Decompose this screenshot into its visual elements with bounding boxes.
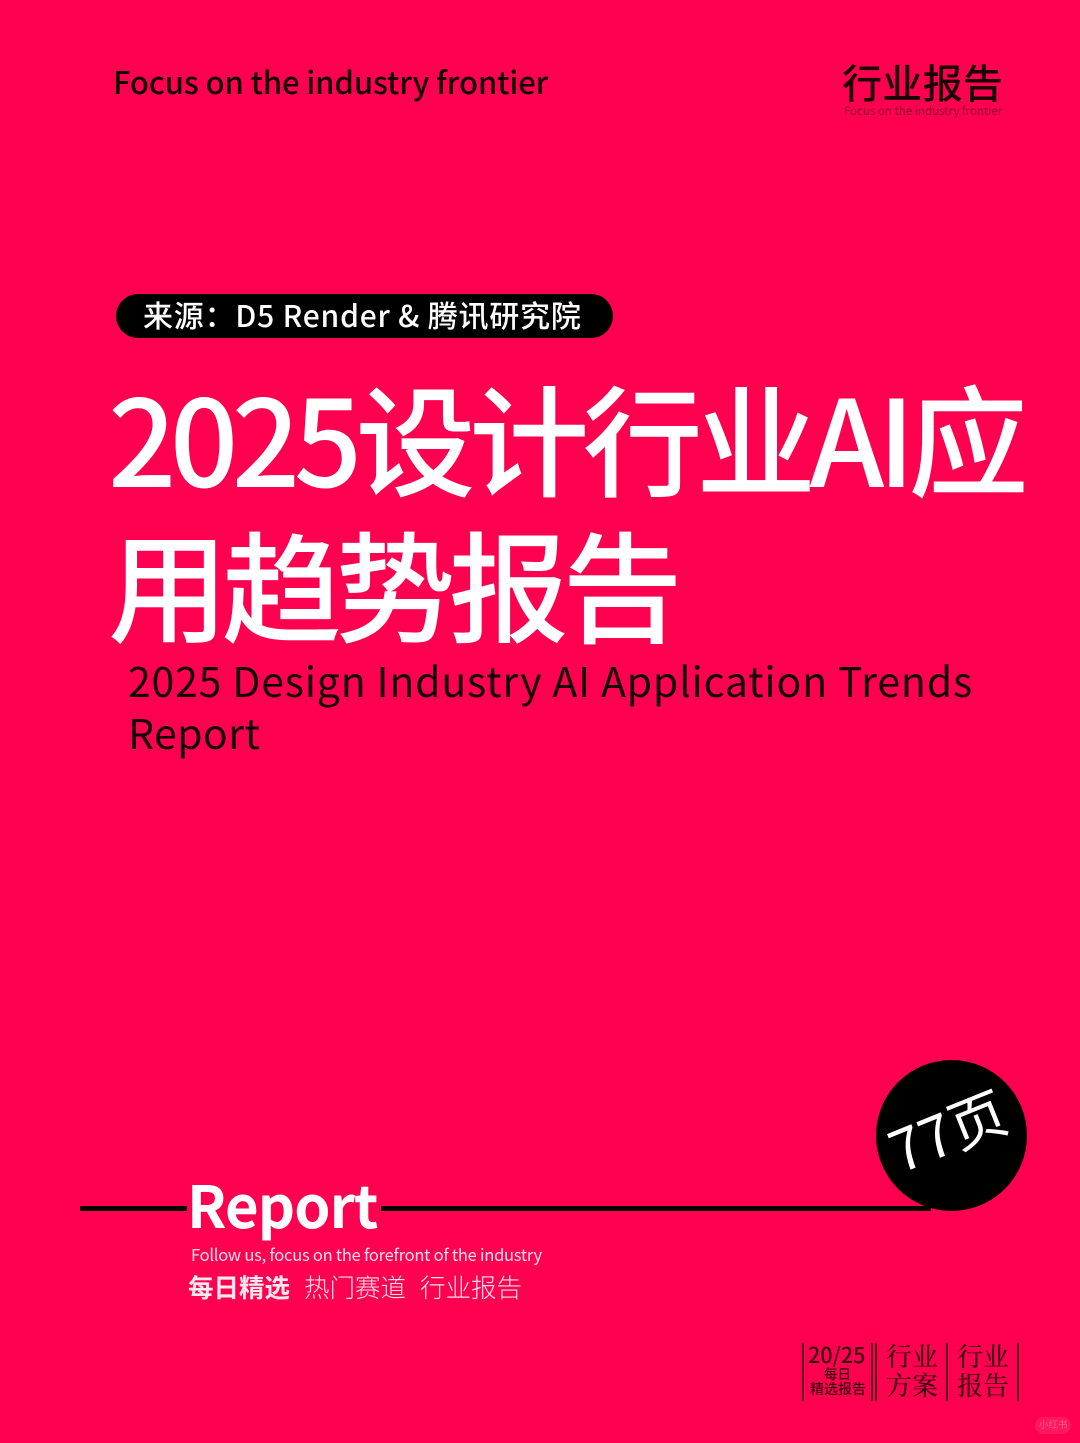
stamp industry report: 行业 <box>957 1337 1009 1374</box>
top right logo <box>842 52 1003 119</box>
hot tracks label: 热门赛道 <box>304 1268 406 1305</box>
bottom right stamp <box>802 1337 1019 1403</box>
source text: 来源：D5 Render & 腾讯研究院 <box>143 292 582 336</box>
main title <box>108 348 1024 668</box>
subtitle line 1: 2025 Design Industry AI Application Trends <box>128 649 973 709</box>
category labels <box>188 1268 522 1305</box>
top tagline: Focus on the industry frontier <box>113 58 548 103</box>
stamp divider 1 <box>802 1343 804 1401</box>
daily picks label: 每日精选 <box>188 1268 290 1305</box>
industry reports label: 行业报告 <box>420 1268 522 1305</box>
subtitle line 2: Report <box>128 701 260 761</box>
logo heading: 行业报告 <box>842 52 1003 110</box>
horizontal rule right <box>381 1206 931 1211</box>
stamp year: 20/25 <box>808 1339 865 1370</box>
page count text: 77页 <box>876 1068 1018 1190</box>
stamp industry plan: 行业 <box>886 1337 938 1374</box>
page count badge <box>876 1060 1027 1211</box>
title line 2: 用趋势报告 <box>108 494 676 668</box>
source pill <box>116 294 613 338</box>
english subtitle <box>128 649 973 761</box>
follow us text: Follow us, focus on the forefront of the industry <box>191 1242 542 1266</box>
logo subtitle: Focus on the industry frontier <box>844 103 1002 119</box>
watermark <box>1035 1417 1071 1434</box>
horizontal rule left <box>80 1206 187 1211</box>
stamp industry plan: 方案 <box>886 1366 938 1403</box>
report heading: Report <box>187 1161 378 1245</box>
stamp picks: 精选报告 <box>810 1379 866 1399</box>
watermark text: 小红书 <box>1039 1417 1068 1431</box>
stamp industry report: 报告 <box>957 1366 1009 1403</box>
stamp daily: 每日 <box>824 1363 851 1383</box>
stamp industry plan <box>886 1337 938 1403</box>
stamp divider double <box>871 1343 877 1401</box>
title line 1: 2025设计行业AI应 <box>108 348 1022 522</box>
stamp divider 4 <box>1017 1343 1019 1401</box>
stamp divider 3 <box>946 1343 948 1401</box>
stamp industry report <box>957 1337 1009 1403</box>
